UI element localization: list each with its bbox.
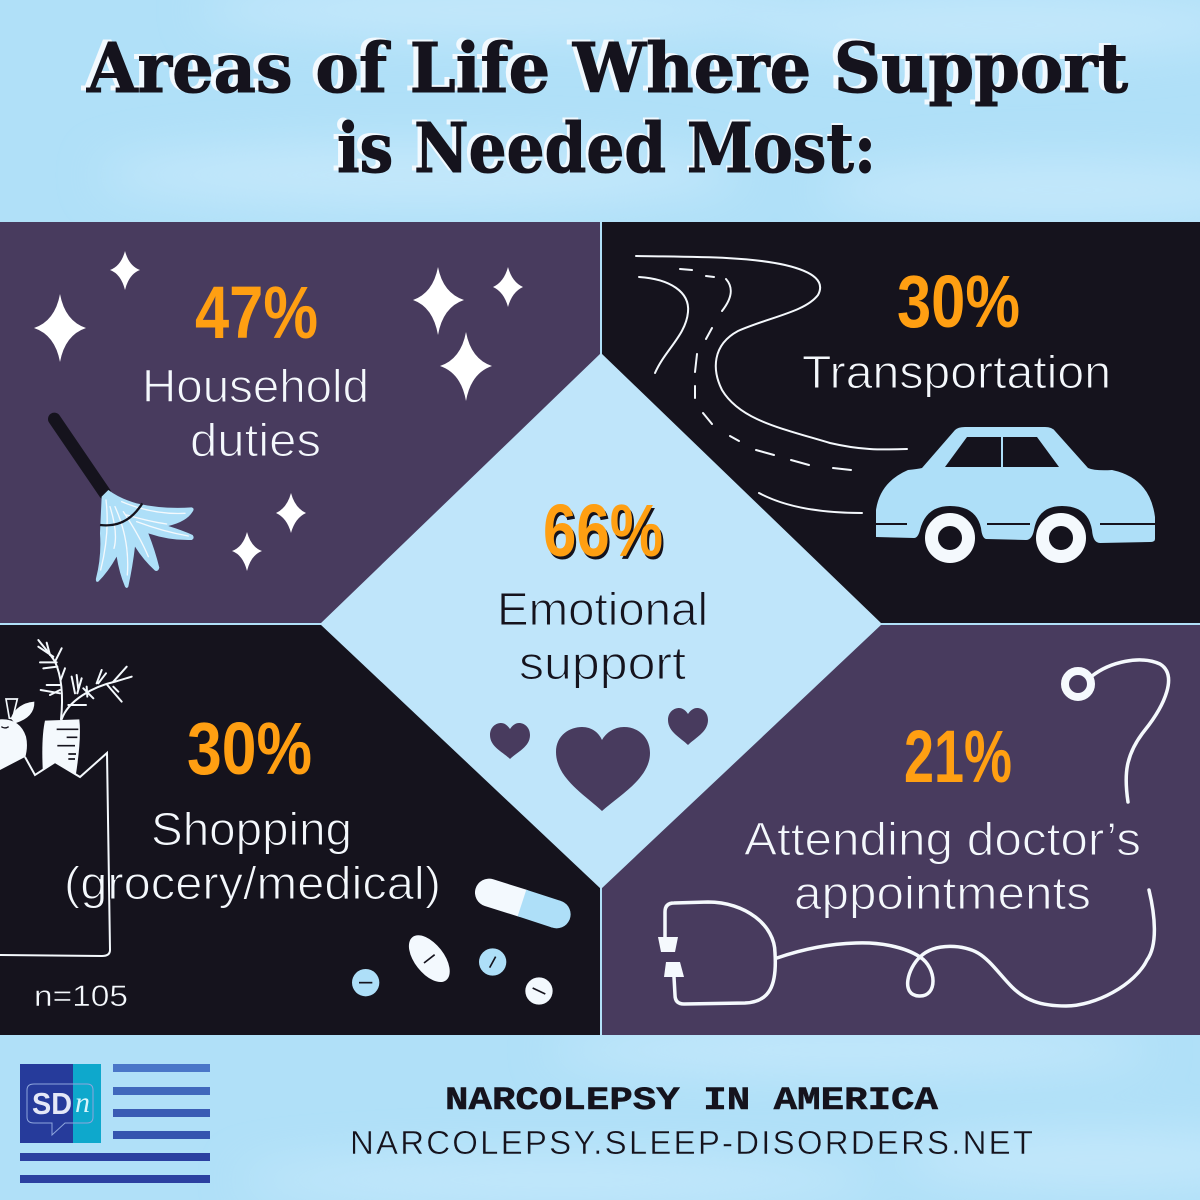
title: Areas of Life Where Support	[86, 29, 1129, 109]
icon: grocery bag	[0, 640, 132, 956]
label: household duties: Household	[142, 360, 369, 412]
icon: sparkles	[34, 251, 523, 571]
label: transportation: Transportation	[802, 346, 1111, 398]
stat: 47%: 47%	[195, 271, 318, 354]
panel: emotional support	[320, 353, 882, 889]
icon: winding road	[636, 256, 907, 513]
label: shopping: Shopping	[151, 803, 352, 855]
label: emotional support: support	[519, 637, 686, 689]
panel: transportation	[602, 222, 1200, 623]
title	[81, 27, 1129, 189]
footer url: NARCOLEPSY.SLEEP-DISORDERS.NET	[350, 1124, 1033, 1161]
title: is Needed Most:	[332, 107, 876, 187]
panel: doctor's appointments	[602, 625, 1200, 1035]
panel: shopping	[0, 625, 600, 1035]
label: shopping	[64, 803, 441, 909]
label: attending doctor's appointments	[744, 813, 1141, 919]
icon: stethoscope	[658, 660, 1169, 1006]
stat: 66%: 66%	[545, 492, 665, 575]
title: is Needed Most:	[337, 109, 876, 189]
icon: car	[876, 427, 1155, 556]
logo: SDn flag	[20, 1064, 210, 1183]
label: attending doctor's appointments: Attending doctor’s	[744, 813, 1141, 865]
footer title: NARCOLEPSY IN AMERICA	[445, 1082, 939, 1119]
icon: hearts	[490, 708, 708, 811]
stat: 21%: 21%	[904, 715, 1012, 798]
icon: pills	[352, 893, 571, 1005]
label: shopping: (grocery/medical)	[64, 857, 441, 909]
icon: feather duster	[54, 419, 194, 588]
stat: 66%: 66%	[543, 489, 663, 572]
stat: 30% shopping: 30%	[187, 707, 312, 790]
logo: SDn flag: SD	[32, 1086, 72, 1121]
title: Areas of Life Where Support	[81, 27, 1124, 107]
label: attending doctor's appointments: appointments	[794, 867, 1091, 919]
label: household duties: duties	[190, 414, 321, 466]
stat: 30% transportation: 30%	[897, 260, 1020, 343]
logo: SDn flag: n	[75, 1086, 90, 1119]
panel: household duties	[0, 222, 600, 623]
label: emotional support	[497, 583, 708, 689]
label: household duties	[142, 360, 369, 466]
sample size note: n=105	[34, 980, 128, 1013]
label: emotional support: Emotional	[497, 583, 708, 635]
